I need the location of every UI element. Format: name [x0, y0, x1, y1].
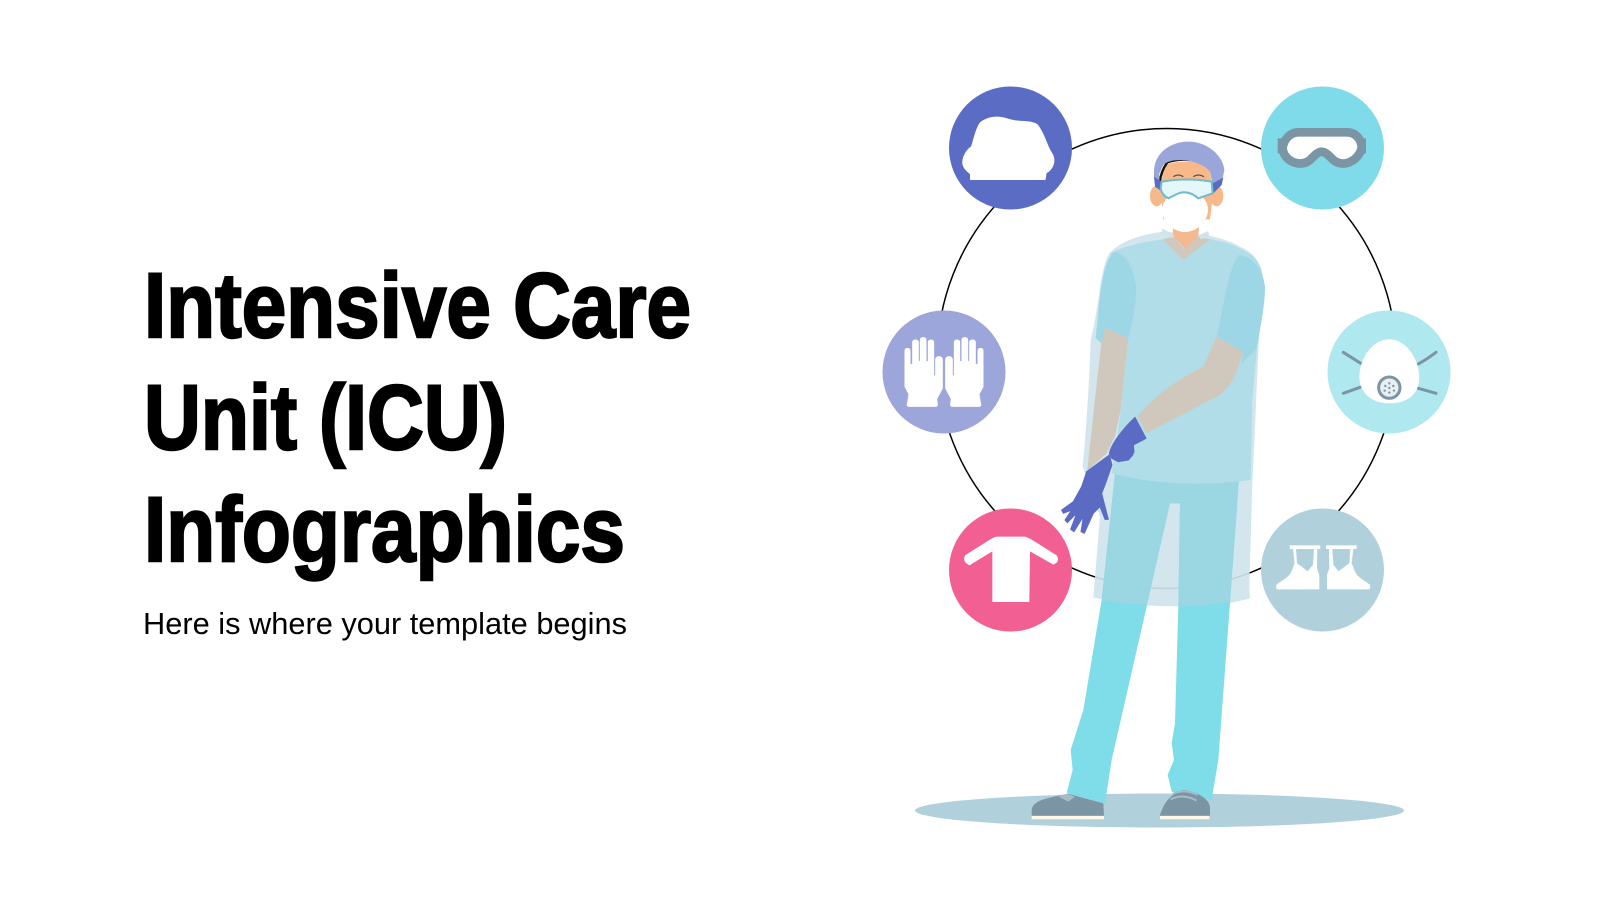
goggles: [1161, 179, 1213, 198]
icon: surgical cap: [949, 86, 1072, 210]
trousers under gown: [1102, 473, 1239, 607]
subtitle: Here is where your template begins: [143, 606, 627, 641]
left arm: [1087, 328, 1128, 471]
cap: [1154, 142, 1224, 185]
icon: goggles: [1261, 86, 1384, 210]
shirt: [1110, 239, 1263, 484]
title: Infographics: [144, 479, 625, 581]
healthcare worker figure: [1032, 142, 1265, 819]
left sleeve: [1096, 252, 1136, 343]
trousers: [1067, 473, 1239, 803]
collar: [1162, 228, 1209, 239]
head: [1150, 142, 1224, 249]
right shoe: [1160, 790, 1210, 819]
transparent gown: [1083, 232, 1265, 606]
goggle straps: [1154, 177, 1223, 193]
neckline: [1163, 237, 1211, 260]
gloves on hands: [1062, 417, 1146, 533]
left shoe: [1032, 794, 1104, 819]
eyes: [1173, 175, 1204, 177]
title: [144, 255, 691, 581]
neck: [1173, 227, 1199, 249]
hair: [1160, 160, 1203, 182]
right sleeve: [1217, 255, 1265, 363]
floor shadow: [915, 794, 1404, 828]
icon: respirator mask: [1328, 310, 1450, 434]
icon: gloves: [882, 310, 1006, 434]
face: [1161, 162, 1213, 219]
title: Intensive Care: [144, 255, 691, 357]
icon: scrub shirt: [949, 508, 1072, 632]
face mask: [1162, 191, 1208, 232]
right arm: [1137, 337, 1243, 433]
ears: [1150, 186, 1223, 206]
icon: boot covers: [1261, 508, 1384, 632]
title: Unit (ICU): [144, 367, 507, 469]
connecting ring: [937, 128, 1396, 588]
